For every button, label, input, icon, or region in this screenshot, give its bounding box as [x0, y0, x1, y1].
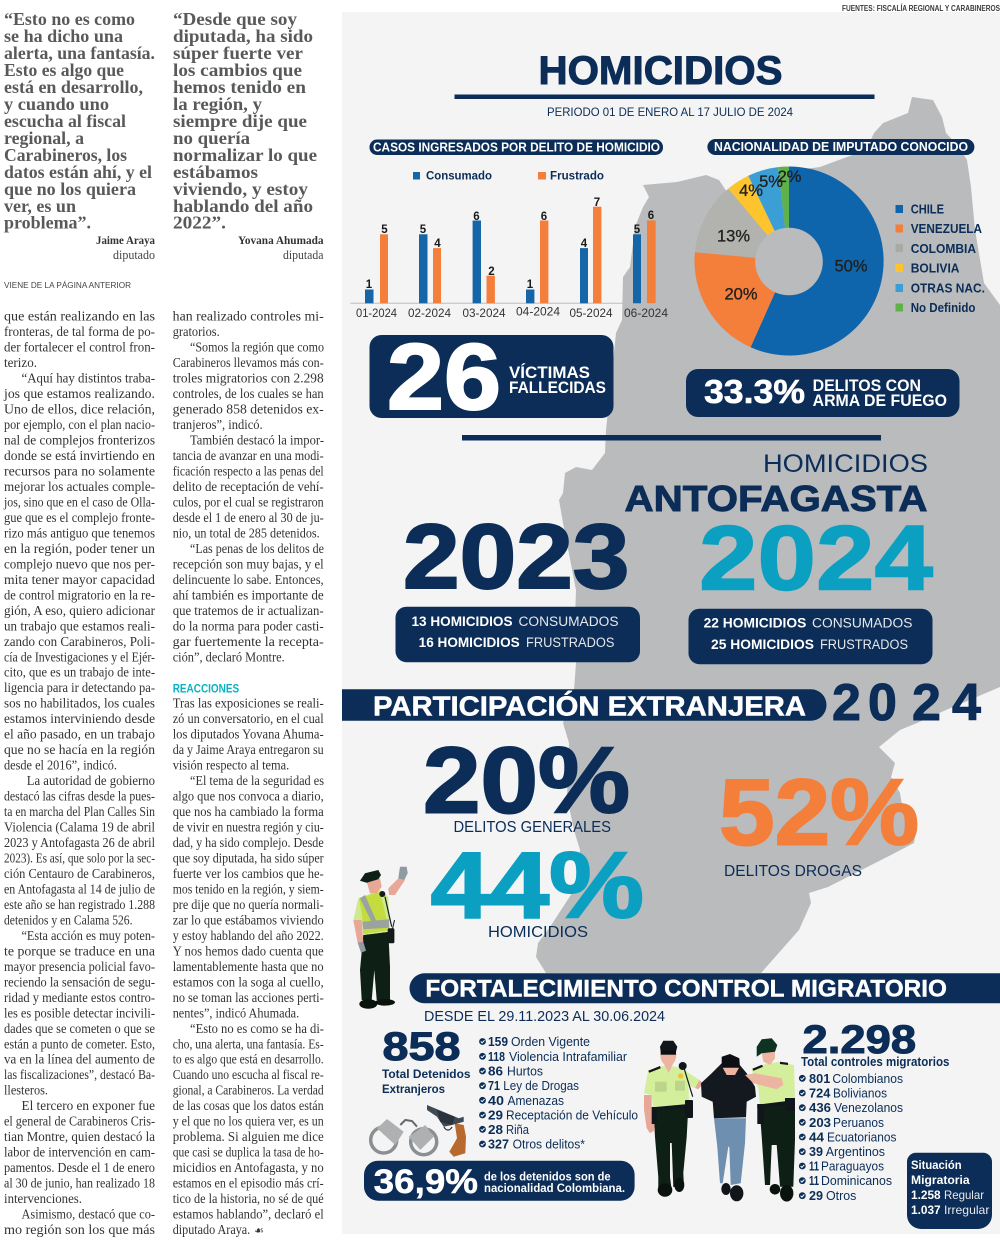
article text column 1: jos que estamos realizando. [3, 386, 155, 401]
bars and values: 5 [634, 224, 641, 236]
quote: Yovana Ahumada: “Desde que soy [173, 9, 297, 29]
list: detainee offences: 71 [488, 1078, 500, 1093]
article text column 2: micidios en Antofagasta, y no [173, 1160, 324, 1175]
list: detainee offences: 28 [488, 1122, 503, 1137]
article text column 2: do la norma para poder casti- [173, 618, 324, 633]
attribution: Jaime Araya [96, 233, 155, 262]
article text column 2: También destacó la impor- [190, 432, 324, 448]
year 2023: 2023 [403, 506, 629, 608]
article text column 2: zó un conversatorio, en el cual [173, 711, 324, 726]
article text column 2: ☙ [254, 1224, 264, 1237]
detainee [701, 1054, 756, 1201]
article text column 2: nentes”, indicó Ahumada. [173, 1005, 299, 1020]
month labels: 06-2024 [624, 308, 669, 320]
bars and values: 6 [648, 210, 654, 222]
list: controlled nationalities [799, 1071, 903, 1203]
article text column 2: delincuente lo sabe. Entonces, [173, 572, 324, 587]
bars and values: 4 [581, 238, 588, 250]
article text column 2: tico de la historia, no sé de qué [173, 1191, 324, 1206]
article text column 1: 2023 y Antofagasta 26 de abril [4, 835, 155, 850]
callout: 36,9% Colombian detainees: nacionalidad Colombiana. [484, 1181, 625, 1195]
list: controlled nationalities: 39 [809, 1144, 823, 1159]
list: controlled nationalities: Paraguayos [821, 1158, 884, 1174]
callout: 33.3% firearm: 33.3% [704, 373, 805, 410]
bars and values: 1 [527, 279, 534, 291]
quote: Jaime Araya: Carabineros, los [4, 145, 127, 165]
article text column 1: detenidos y en Calama 526. [4, 912, 132, 927]
attribution: Yovana Ahumada: Yovana Ahumada [238, 233, 324, 247]
article text column 2: cho, una alerta, una fantasía. Es- [173, 1036, 324, 1051]
list: detainee offences: 118 [488, 1049, 505, 1064]
article text column 1: este año se han registrado 1.288 [4, 897, 155, 912]
stat: 858 detainees: Total Detenidos [382, 1067, 471, 1081]
callout: 36,9% Colombian detainees: de los detenidos son de [484, 1170, 611, 1184]
article text column 2: “Las penas de los delitos de [190, 541, 324, 556]
list: controlled nationalities: 44 [809, 1130, 825, 1144]
quote: Jaime Araya: escucha al fiscal [4, 111, 126, 131]
callout: migratory status: 1.258 [911, 1188, 941, 1202]
donut legend: OTRAS NAC. [911, 282, 985, 296]
quote: Jaime Araya [4, 9, 155, 232]
list: detainee offences: Orden Vigente [511, 1034, 590, 1049]
month labels [356, 307, 669, 320]
quote: Jaime Araya: ver, es un [4, 196, 76, 216]
article text column 1: en la región, poder tener un [4, 541, 155, 556]
quote: Jaime Araya: que no los quiera [4, 179, 136, 199]
donut legend: No Definido [911, 301, 976, 315]
callout: 36,9% Colombian detainees [364, 1161, 635, 1201]
article text column 2: delito de receptación de vehí- [173, 479, 324, 494]
quote: Yovana Ahumada: hemos tenido en [173, 77, 306, 97]
list: controlled nationalities: Colombianos [832, 1071, 903, 1086]
article text column 1: están a punto de cometer. Esto, [4, 1036, 155, 1051]
callout: migratory status: Situación [911, 1158, 962, 1172]
bars and values: 5 [381, 224, 388, 236]
bars and values [365, 197, 656, 303]
article text column 1: gión, A eso, quiero adicionar [4, 603, 155, 618]
quote: Jaime Araya: regional, a [4, 128, 84, 148]
list: detainee offences: 327 [488, 1136, 509, 1152]
stat: 44% homicides: 44% [431, 832, 644, 938]
quote: Yovana Ahumada: los cambios que [173, 60, 302, 80]
list: controlled nationalities: 11 [809, 1173, 819, 1188]
article text column 1: ridad y mediante estos contro- [4, 990, 155, 1005]
quote: Jaime Araya: problema”. [4, 212, 91, 232]
article text column 2: que nos ha cambiado la forma [173, 804, 324, 819]
stat: 44% homicides: HOMICIDIOS [488, 924, 588, 941]
article text column 2: pre dije que no quería normali- [173, 897, 324, 912]
section banner: fortalecimiento control migratorio: FORTALECIMIENTO CONTROL MIGRATORIO [425, 976, 947, 1002]
quote: Yovana Ahumada: estábamos [173, 162, 258, 182]
donut percent labels: 2% [778, 168, 802, 186]
article text column 1: sos no habilitados, los cuales [4, 696, 155, 711]
chart heading pill: CASOS INGRESADOS POR DELITO DE HOMICIDIO [373, 140, 660, 154]
list: controlled nationalities: Bolivianos [833, 1086, 887, 1100]
donut legend: COLOMBIA [911, 242, 976, 256]
article text column 1: mayor presencia policial favo- [4, 959, 155, 974]
stats box 2023: CONSUMADOS [518, 614, 618, 629]
article text column 1: reciendo la sensación de segu- [4, 974, 155, 989]
article text column 2: y el que no los quiera ver, es un [173, 1114, 324, 1129]
article text column 1: mejorar los actuales comple- [4, 479, 155, 494]
donut legend: VENEZUELA [911, 222, 982, 236]
list: controlled nationalities: Peruanos [833, 1115, 884, 1130]
callout: 33.3% firearm: DELITOS CON [813, 377, 921, 395]
callout: migratory status: Migratoria [911, 1173, 970, 1187]
bars and values: 4 [434, 238, 441, 250]
article text column 1: recursos para no solamente [4, 464, 155, 478]
stat: 2.298 controls: 2.298 [802, 1018, 916, 1062]
article text column 2: diputado Araya. [173, 1222, 250, 1237]
month labels: 04-2024 [516, 307, 561, 319]
officer right [745, 1038, 795, 1202]
attribution: Jaime Araya: diputado [113, 248, 155, 262]
stat: 858 detainees [382, 1025, 471, 1096]
article text column 1: El tercero en exponer fue [22, 1098, 155, 1113]
article text column 2: los diputados Yovana Ahuma- [173, 727, 324, 742]
article text column 2: da y Jaime Araya entregaron su [173, 742, 324, 757]
infographic panel [342, 12, 1000, 1234]
stat: 52% drug crimes: 52% [719, 760, 919, 864]
list: controlled nationalities: Argentinos [826, 1144, 885, 1159]
month labels: 03-2024 [462, 308, 506, 320]
article text column 2: Carabineros llevamos más con- [173, 355, 324, 370]
article text column 1: las fiscalizaciones”, destacó Ba- [4, 1067, 155, 1082]
stats box 2023: FRUSTRADOS [526, 635, 614, 650]
banner year: 2024 [832, 674, 981, 732]
article text column 2: visión respecto al tema. [173, 758, 289, 773]
article text column 2: “Esto no es como se ha di- [190, 1021, 324, 1036]
article text column 1: va en la línea del aumento de [4, 1052, 155, 1067]
attribution: Yovana Ahumada [238, 233, 324, 262]
article text column 2: “El tema de la seguridad es [190, 773, 324, 788]
article text column 1: terizo. [4, 355, 37, 370]
article text column 1: que no se hacía en la región [4, 742, 155, 757]
article text column 2: Y nos hemos dado cuenta que [173, 943, 324, 958]
callout: 26 victims: VÍCTIMAS [509, 363, 590, 382]
callout: migratory status: Irregular [944, 1203, 989, 1217]
donut percent labels [717, 168, 868, 304]
quote: Yovana Ahumada [173, 9, 317, 232]
list: detainee offences: Violencia Intrafamiliar [509, 1049, 628, 1064]
list: detainee offences: 159 [488, 1034, 508, 1049]
article text column 1: cía de Investigaciones y el Ejér- [4, 649, 155, 664]
article text column 2: mos tenido en la región, y siem- [173, 882, 324, 896]
heading: homicidios antofagasta: ANTOFAGASTA [624, 478, 928, 519]
article text column 1: al 30 de junio, han realizado 18 [4, 1176, 155, 1191]
attribution: Yovana Ahumada: diputada [283, 248, 324, 262]
list: controlled nationalities: 29 [809, 1188, 823, 1203]
heading: homicidios antofagasta: HOMICIDIOS [763, 450, 928, 478]
quote: Yovana Ahumada: 2022”. [173, 212, 226, 232]
stats box 2023: 13 HOMICIDIOS [412, 614, 512, 629]
article text column 1: mita tener mayor capacidad [4, 572, 155, 587]
donut percent labels: 20% [724, 286, 758, 304]
callout: 26 victims [370, 324, 614, 429]
attribution: Jaime Araya: Jaime Araya [96, 233, 155, 247]
article text column 2: “Somos la región que como [190, 340, 324, 355]
article text column 2: culos, por el cual se registraron [173, 494, 324, 510]
stat: 2.298 controls: Total controles migratorios [801, 1055, 949, 1069]
bar chart: cases by month [350, 140, 669, 320]
article text column 1: que están realizando en las [4, 309, 155, 324]
left newspaper column [3, 9, 324, 1237]
article text column 2: algo que nos convoca a diario, [173, 789, 324, 804]
article text column 2: estamos en el episodio más crí- [173, 1176, 324, 1191]
title: HOMICIDIOS [538, 49, 782, 93]
article text column 2: troles migratorios con 2.298 [173, 371, 324, 386]
donut percent labels: 50% [834, 258, 868, 276]
article text column 2: desde el 1 de enero al 30 de ju- [173, 510, 324, 525]
donut percent labels: 5% [759, 173, 783, 191]
list: detainee offences: 40 [488, 1093, 504, 1108]
bars and values: 2 [488, 266, 495, 278]
article text column 1: donde se está invirtiendo en [4, 448, 155, 463]
list: controlled nationalities: 801 [809, 1071, 830, 1086]
month labels: 02-2024 [408, 308, 452, 320]
article text column 1: rizo más antiguo que tenemos [4, 525, 155, 540]
quote: Yovana Ahumada: normalizar lo que [173, 145, 317, 165]
month labels: 05-2024 [570, 308, 613, 320]
article text column 1: de control migratorio en la re- [4, 587, 155, 602]
article text column 2: dad, y ha sido complejo. Desde [173, 835, 324, 850]
section banner: participación extranjera: PARTICIPACIÓN EXTRANJERA [373, 690, 806, 722]
list: controlled nationalities: Dominicanos [821, 1173, 892, 1188]
article text column 2 [173, 309, 324, 1237]
stat: 858 detainees: 858 [382, 1025, 460, 1069]
month labels: 01-2024 [356, 308, 398, 320]
article text column 1: desde el 2016”, indicó. [4, 758, 117, 773]
article text column 1: les es posible detectar incivili- [4, 1005, 155, 1020]
stats box 2024: 25 HOMICIDIOS [711, 637, 814, 652]
article text column 1: 2023). Es así, que solo por la sec- [4, 850, 155, 866]
quote: Yovana Ahumada: diputada, ha sido [173, 26, 313, 46]
list: detainee offences: 29 [488, 1108, 503, 1122]
callout: 36,9% Colombian detainees: 36,9% [374, 1163, 478, 1201]
article text column 2: ficación respecto a las penas del [173, 464, 324, 478]
article text column 1: te porque se traduce en una [4, 943, 155, 958]
quote: Yovana Ahumada: la región, y [173, 94, 262, 114]
article text column 2: Tras las exposiciones se reali- [173, 696, 324, 711]
donut percent labels: 13% [717, 228, 750, 246]
callout: migratory status: 1.037 [911, 1203, 941, 1217]
article text column 1: Uno de ellos, dice relación, [4, 402, 155, 417]
quote: Yovana Ahumada: hablando del año [173, 196, 313, 216]
period subtitle: PERIODO 01 DE ENERO AL 17 JULIO DE 2024 [547, 105, 793, 119]
article text column 2: gratorios. [173, 324, 220, 339]
article text column 1: ción Centauro de Carabineros, [4, 866, 155, 881]
callout: migratory status: Regular [944, 1188, 984, 1202]
quote: Jaime Araya: “Esto no es como [4, 9, 135, 29]
callout: 26 victims: FALLECIDAS [509, 379, 606, 397]
quote: Jaime Araya: y cuando uno [4, 94, 109, 114]
callout: 33.3% firearm: ARMA DE FUEGO [813, 392, 947, 410]
list: controlled nationalities: 11 [809, 1158, 819, 1174]
year 2024: 2024 [699, 508, 933, 610]
article text column 2: tancia de avanzar en una modi- [173, 448, 324, 463]
article text column 1: dades que se cometen o que se [4, 1021, 155, 1036]
article text column 2: que soy diputada, ha sido súper [173, 850, 324, 866]
article text column 1: labor de intervención en cam- [4, 1145, 155, 1160]
list: detainee offences: Otros delitos* [513, 1136, 585, 1152]
article text column 2: Cuando uno escucha al fiscal re- [173, 1067, 324, 1082]
donut legend: BOLIVIA [911, 262, 960, 276]
article text column 2: que tratemos de ir actualizan- [173, 603, 324, 618]
list: detainee offences: Ley de Drogas [503, 1078, 579, 1093]
stat: 52% drug crimes: DELITOS DROGAS [724, 863, 862, 880]
article text column 2: fuerte ver los cambios que he- [173, 866, 324, 881]
quote: Yovana Ahumada: súper fuerte ver [173, 43, 303, 63]
article text column 2: y estoy hablando del año 2022. [173, 928, 324, 943]
heading: homicidios antofagasta [624, 450, 928, 519]
article text column 2: tranjeros”, indicó. [173, 417, 263, 432]
officer left [644, 1041, 703, 1197]
icon: officers escorting a detainee [644, 1038, 795, 1202]
article text column 2: lamentablemente hasta que no [173, 959, 324, 974]
quote: Jaime Araya: se ha dicho una [4, 26, 123, 46]
article text column 1: nal de complejos fronterizos [4, 432, 155, 448]
bars and values: 1 [366, 279, 373, 291]
article text column 2: to es algo que está en desarrollo. [173, 1052, 324, 1067]
chart legend [413, 168, 604, 182]
article text column 2: generado 858 detenidos ex- [173, 402, 324, 417]
list: detainee offences: Riña [506, 1122, 530, 1137]
article text column 1: gue que es el complejo fronte- [4, 510, 155, 525]
icon: handcuffs [371, 1119, 437, 1155]
article text column 2: estamos hablando”, declaró el [173, 1206, 324, 1222]
article text column 1: intervenciones. [4, 1191, 82, 1206]
article text column 2: no se toman las acciones perti- [173, 990, 324, 1005]
icon: revolver [427, 1105, 466, 1157]
quote: Jaime Araya: Esto es algo que [4, 60, 124, 80]
callout: 26 victims: 26 [387, 324, 501, 429]
article text column 1: ligencia para ir detectando pa- [4, 680, 155, 695]
article text column 1: Asimismo, destacó que co- [22, 1206, 155, 1222]
donut chart: nationality of accused [694, 139, 985, 355]
callout: migratory status [907, 1153, 992, 1229]
stats box 2024 [688, 609, 932, 664]
quote: Yovana Ahumada: no quería [173, 128, 250, 148]
quote: Jaime Araya: está en desarrollo, [4, 77, 143, 97]
stat: 20% general crimes: 20% [423, 728, 630, 832]
article text column 2: gional, a Carabineros. La verdad [173, 1083, 324, 1098]
chart legend: Consumado [426, 168, 492, 182]
list: detainee offences: Amenazas [508, 1093, 564, 1108]
article text column 1: el año pasado, en un trabajo [4, 727, 155, 742]
list: controlled nationalities: 203 [809, 1115, 831, 1130]
panel background [342, 12, 1000, 1234]
stats box 2024: 22 HOMICIDIOS [704, 616, 806, 630]
quote: Jaime Araya: alerta, una fantasía. [4, 43, 155, 63]
list: detainee offences: 86 [488, 1064, 503, 1078]
article text column 1: “Esta acción es muy poten- [22, 928, 155, 943]
stats box 2024: FRUSTRADOS [820, 637, 908, 652]
quote: Yovana Ahumada: viviendo, y estoy [173, 179, 308, 199]
article text column 2: nio, un total de 285 detenidos. [173, 525, 320, 540]
callout: 33.3% firearm [686, 369, 960, 417]
article text column 1: un trabajo que estamos reali- [4, 618, 155, 633]
article text column 2: ción”, declaró Montre. [173, 649, 285, 664]
article text column 1: complejo nuevo que nos per- [4, 556, 155, 571]
stat: 2.298 controls [801, 1018, 949, 1069]
article text column 2: estamos con la soga al cuello, [173, 974, 324, 989]
list: controlled nationalities: Venezolanos [834, 1100, 903, 1115]
article text column 1: der fortalecer el control fron- [4, 340, 155, 355]
bars and values: 6 [473, 211, 480, 223]
list: detainee offences: Receptación de Vehículo [506, 1108, 638, 1122]
list: controlled nationalities: Ecuatorianos [827, 1130, 897, 1144]
article text column 1: destacó las cifras desde la pues- [4, 789, 155, 804]
icon: traffic police officer [353, 867, 408, 1009]
article text column 1: estamos interviniendo desde [4, 711, 155, 726]
quote: Jaime Araya: datos están ahí, y el [4, 162, 152, 182]
article text column 2: gar fuertemente la recepta- [173, 634, 324, 649]
article text column 1: jos, sino que en el caso de Olla- [3, 494, 155, 510]
article text column 1: tian Montre, quien destacó la [4, 1129, 155, 1144]
bars and values: 5 [420, 224, 427, 236]
bars and values: 7 [594, 197, 600, 209]
article text column 1 [3, 309, 155, 1237]
stats box 2023: 16 HOMICIDIOS [419, 635, 520, 650]
bars and values: 6 [541, 211, 547, 223]
list: detainee offences: Hurtos [507, 1064, 543, 1078]
chart legend: Frustrado [550, 168, 604, 182]
article text column 2: controles, de los cuales se han [173, 386, 324, 401]
list: detainee offences [479, 1034, 638, 1152]
article text column 1: “Aquí hay distintos traba- [22, 371, 155, 386]
article text column 1: pamentos. Desde el 1 de enero [4, 1160, 155, 1175]
list: controlled nationalities: 724 [809, 1086, 831, 1100]
kicker: viene de la página anterior: VIENE DE LA PÁGINA ANTERIOR [4, 280, 131, 290]
donut legend [896, 202, 985, 315]
date range: DESDE EL 29.11.2023 AL 30.06.2024 [424, 1009, 665, 1025]
subheading: reacciones: REACCIONES [173, 684, 239, 696]
donut slices [694, 166, 884, 355]
article text column 1: mo región son los que más [4, 1222, 155, 1237]
chart heading pill: NACIONALIDAD DE IMPUTADO CONOCIDO [714, 140, 968, 154]
article text column 1: en Antofagasta al 14 de julio de [4, 882, 155, 896]
stat: 20% general crimes: DELITOS GENERALES [454, 819, 611, 836]
article text column 1: La autoridad de gobierno [27, 773, 155, 788]
article text column 1: ta en marcha del Plan Calles Sin [4, 804, 155, 819]
article text column 2: recepción son muy bajas, y el [173, 556, 324, 571]
list: controlled nationalities: Otros [826, 1188, 857, 1203]
article text column 1: cito, que es un trabajo de inte- [4, 665, 155, 680]
article text column 2: que casi se duplica la tasa de ho- [173, 1145, 324, 1160]
article text column 2: han realizado controles mi- [173, 309, 324, 324]
article text column 1: por ejemplo, con el plan nacio- [4, 417, 155, 432]
article text column 1: fronteras, de tal forma de po- [4, 324, 155, 339]
quote: Yovana Ahumada: siempre dije que [173, 111, 307, 131]
article text column 1: Violencia (Calama 19 de abril [4, 820, 155, 834]
stat: 858 detainees: Extranjeros [382, 1082, 445, 1096]
map of the Antofagasta region [536, 97, 1000, 973]
donut percent labels: 4% [739, 182, 763, 200]
article text column 2: de vivir en nuestra región y ciu- [173, 820, 324, 834]
stats box 2023 [396, 607, 640, 662]
stats box 2024: CONSUMADOS [812, 616, 912, 630]
article text column 2: zar lo que estábamos viviendo [173, 912, 324, 927]
article text column 1: llesteros. [4, 1083, 48, 1098]
list: controlled nationalities: 436 [809, 1100, 831, 1115]
donut legend: CHILE [911, 202, 944, 216]
article text column 2: ahí también es importante de [173, 587, 324, 602]
article text column 2: de las cosas que los datos están [173, 1098, 324, 1113]
article text column 1: zando con Carabineros, Poli- [4, 634, 155, 649]
article text column 1: el general de Carabineros Cris- [4, 1114, 155, 1129]
article text column 2: problema. Si alguien me dice [173, 1129, 324, 1144]
